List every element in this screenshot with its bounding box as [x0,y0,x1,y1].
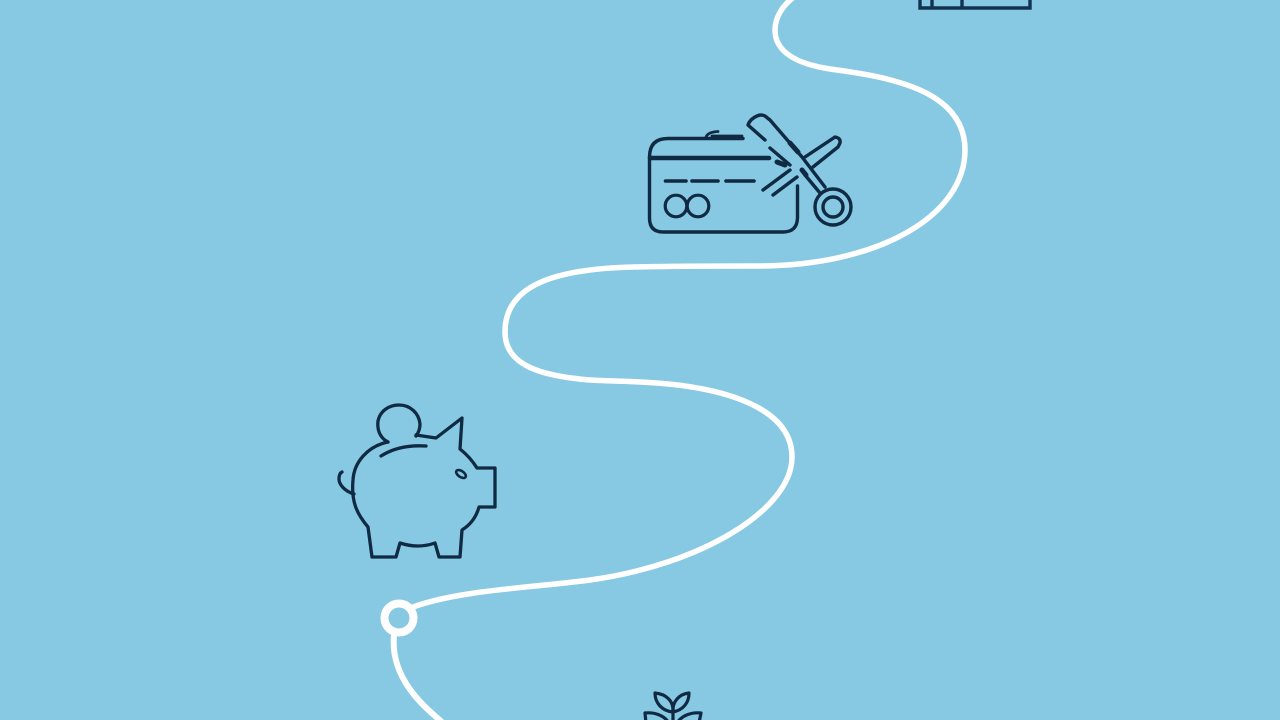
piggy tail [339,472,354,494]
card outline [650,138,798,232]
scissors blade and handle [748,115,825,187]
icon: credit card cut by scissors [650,115,851,232]
winding white path lower section [394,635,442,720]
waypoint ring [384,604,414,632]
scissors blade thick marks [777,143,806,175]
icon: cropped box at top [920,0,1030,8]
lower leaves [645,713,669,720]
card stripe [650,156,769,160]
card logo circles [665,195,687,217]
card dashes [666,179,754,183]
piggy coin [378,405,420,442]
piggy body [353,418,495,557]
top leaves [655,693,673,712]
card clip tab [706,132,742,137]
piggy coin slot [381,446,426,456]
stem [671,712,675,720]
piggy eye [455,468,467,480]
icon: plant sprout [645,693,701,720]
winding white path upper section [413,0,965,607]
scissors ring [815,189,851,225]
icon: piggy bank [339,405,495,557]
scissors lower left blade [763,170,797,195]
scissors upper right blade [805,137,840,167]
